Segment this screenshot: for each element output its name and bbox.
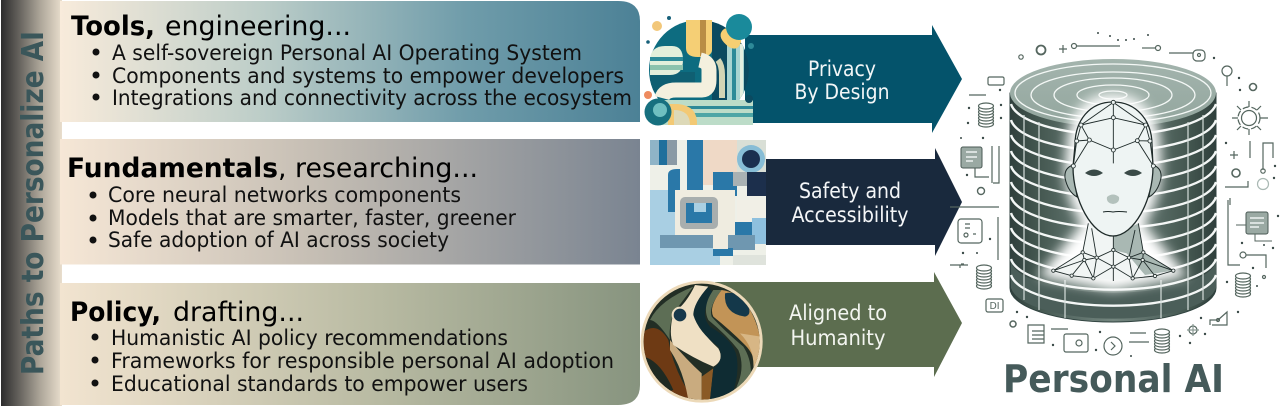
title: Personal AI: Personal AI	[1003, 357, 1224, 401]
heading: fundamentals: , researching...	[278, 153, 478, 184]
icon: cylinder database	[1010, 59, 1216, 322]
image: fundamentals geometric blocks	[650, 140, 766, 265]
arrow: safety and accessibility	[760, 148, 962, 256]
surrounding tech icons	[950, 44, 1273, 355]
heading: tools: engineering...	[165, 11, 351, 42]
fundamentals bullet list: Models that are smarter, faster, greener	[108, 206, 516, 231]
heading: fundamentals	[67, 153, 478, 184]
arrow: aligned to humanity: Humanity	[790, 326, 886, 350]
neck and shoulders	[1052, 223, 1175, 281]
tools bullet list: Components and systems to empower developers	[112, 64, 624, 89]
heading: policy	[70, 297, 304, 328]
image: policy wave circle	[641, 281, 763, 403]
arrow: privacy by design: Privacy	[808, 57, 876, 81]
arrow: safety and accessibility: Safety and	[799, 179, 901, 203]
head network	[1071, 100, 1155, 168]
fundamentals bullet list: Safe adoption of AI across society	[108, 228, 449, 253]
DI icon label: DI	[989, 301, 1000, 312]
filled doc icons	[961, 147, 1272, 241]
arrow: safety and accessibility: Accessibility	[792, 203, 908, 227]
image: tools abstract circle	[644, 14, 754, 126]
head and face	[1065, 100, 1161, 236]
heading: tools: Tools,	[71, 11, 155, 42]
tools bullet list: A self-sovereign Personal AI Operating System	[112, 41, 582, 66]
vertical bar: Paths to Personalize AI	[1, 0, 62, 406]
tools bullet list: Integrations and connectivity across the ecosystem	[112, 86, 632, 111]
heading: tools	[71, 11, 351, 42]
panel: tools	[60, 1, 640, 122]
scattered dots	[960, 32, 1279, 357]
heading: fundamentals: Fundamentals	[67, 153, 278, 184]
policy bullet list: Frameworks for responsible personal AI adoption	[111, 349, 614, 374]
arrow: privacy by design	[745, 25, 962, 133]
arrow: privacy by design: By Design	[794, 80, 890, 104]
policy bullet list: Educational standards to empower users	[111, 372, 528, 397]
mouth	[1103, 210, 1127, 213]
illustration: personal AI cylinder with face	[950, 32, 1279, 357]
tools bullet list	[92, 41, 632, 111]
panel: fundamentals	[60, 139, 640, 264]
heading: policy: drafting...	[173, 297, 304, 328]
nose	[1107, 194, 1119, 204]
glow behind head	[1053, 102, 1173, 282]
fundamentals bullet list	[90, 183, 516, 253]
policy bullet list: Humanistic AI policy recommendations	[111, 326, 508, 351]
arrow: aligned to humanity	[715, 272, 962, 377]
arrow: aligned to humanity: Aligned to	[789, 301, 887, 325]
heading: policy: Policy,	[70, 297, 161, 328]
fundamentals bullet list: Core neural networks components	[108, 183, 461, 208]
eyes	[1085, 170, 1142, 176]
panel: policy	[60, 283, 640, 405]
policy bullet list	[92, 326, 614, 397]
